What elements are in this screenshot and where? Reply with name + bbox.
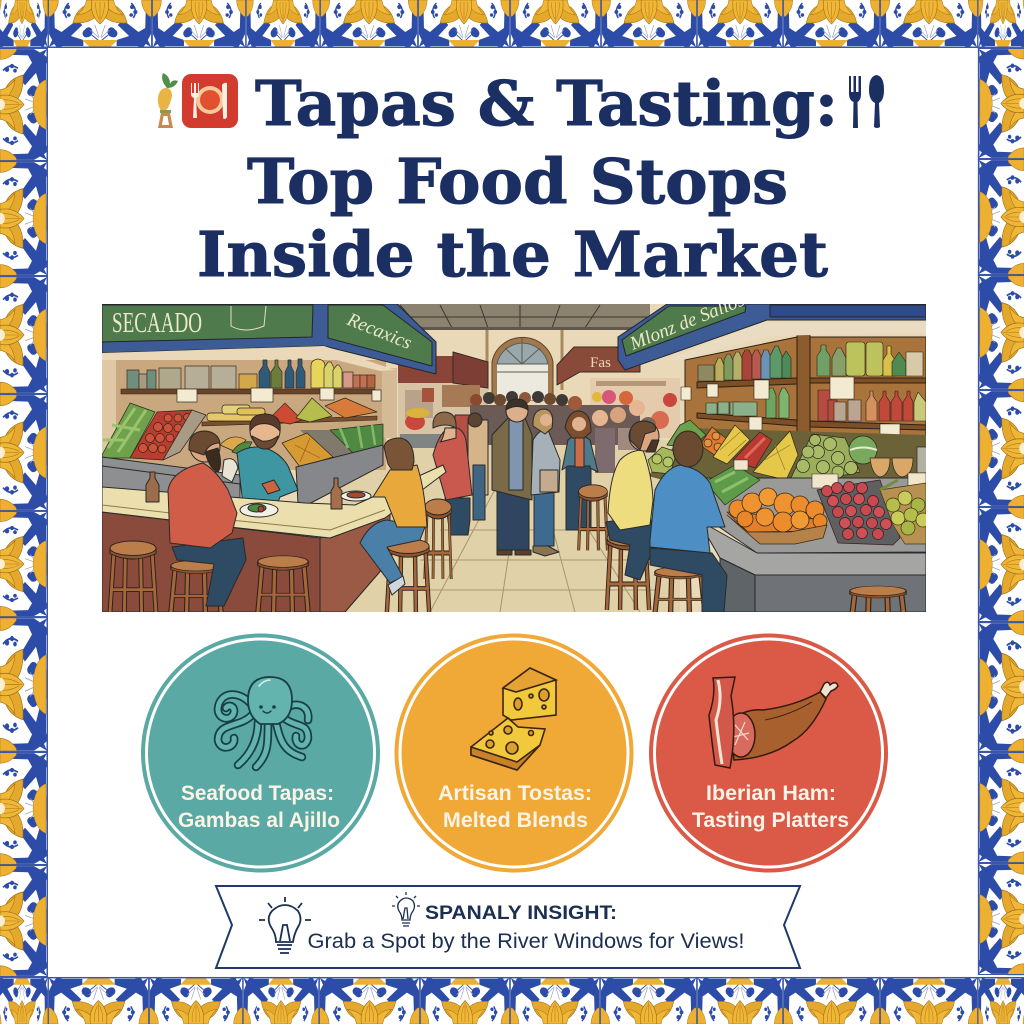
right stall sign: Mlonz de Salios <box>626 290 747 355</box>
icon: ham leg and bacon <box>709 677 838 768</box>
icon: small light bulb <box>392 892 420 926</box>
label: seafood tapas: Gambas al Ajillo <box>178 809 340 832</box>
icon: large light bulb <box>259 897 311 953</box>
icon: octopus <box>218 677 308 767</box>
background crowd <box>470 391 656 473</box>
market illustration <box>102 304 926 612</box>
bar counter <box>102 465 446 612</box>
stools <box>110 485 607 613</box>
left stall glass counter <box>102 445 383 505</box>
right stall sign <box>618 304 926 370</box>
right tile border <box>976 48 1024 975</box>
foreground stool <box>849 586 907 612</box>
arched window <box>492 337 553 400</box>
panel: iberian ham <box>649 634 888 872</box>
banner heading: SPANALY INSIGHT: <box>425 903 617 924</box>
banner text: Grab a Spot by the River Windows for Views! <box>308 930 744 953</box>
market hall ceiling <box>380 304 650 390</box>
icon: red plate with fork and knife <box>182 74 238 128</box>
right stall bottles <box>681 342 926 437</box>
title <box>197 67 838 291</box>
back stall left <box>398 352 488 448</box>
left tile border <box>0 48 50 977</box>
panel: seafood tapas <box>141 634 380 872</box>
tray of red fruit <box>817 480 900 545</box>
produce signs <box>734 460 926 488</box>
top tile border <box>0 0 1024 48</box>
title: Top Food Stops <box>247 145 788 218</box>
man in red shirt <box>168 431 246 613</box>
bar bottles and plates <box>146 472 371 517</box>
back stall right <box>557 347 680 438</box>
label: iberian ham: Tasting Platters <box>692 809 849 832</box>
top shelf jars and bottles <box>127 359 381 402</box>
icon: carrot on stand <box>158 73 178 128</box>
label: seafood tapas: Seafood Tapas: <box>181 782 334 805</box>
title: Tapas & Tasting: <box>255 67 838 140</box>
right stall back wall and shelves <box>684 335 926 435</box>
left stall sign with blue frame: Recaxics <box>343 309 415 354</box>
man in blue sweater <box>650 431 727 615</box>
label: artisan tostas: Artisan Tostas: <box>438 782 592 805</box>
center man in olive coat <box>492 399 532 555</box>
man in yellow shirt <box>606 421 659 610</box>
right vendor counter <box>706 478 926 612</box>
center woman in gray coat <box>531 409 560 556</box>
basket of oranges <box>727 488 827 544</box>
basket of green fruit <box>880 480 930 544</box>
label: artisan tostas: Melted Blends <box>443 809 588 832</box>
title: Inside the Market <box>197 218 828 291</box>
left stall produce <box>102 398 383 467</box>
right stall produce piles <box>648 420 926 480</box>
person in red at back bar <box>433 412 488 535</box>
floor <box>340 440 680 612</box>
back stall right: Fas <box>590 355 611 371</box>
callout: spanaly insight banner <box>216 886 800 968</box>
bottom tile border <box>0 977 1024 1024</box>
left stall sign with blue frame <box>102 304 436 374</box>
left stall sign with blue frame: SECAADO <box>112 308 202 339</box>
label: iberian ham: Iberian Ham: <box>706 782 836 805</box>
bartender in teal <box>237 414 298 505</box>
left stall back wall and shelves <box>102 360 397 470</box>
woman in yellow <box>360 438 429 612</box>
panel: artisan tostas <box>394 634 634 872</box>
center woman in teal jacket <box>562 411 598 530</box>
icon: fork and spoon <box>849 75 884 128</box>
green produce tray <box>705 465 760 505</box>
icon: cheese <box>471 668 556 770</box>
